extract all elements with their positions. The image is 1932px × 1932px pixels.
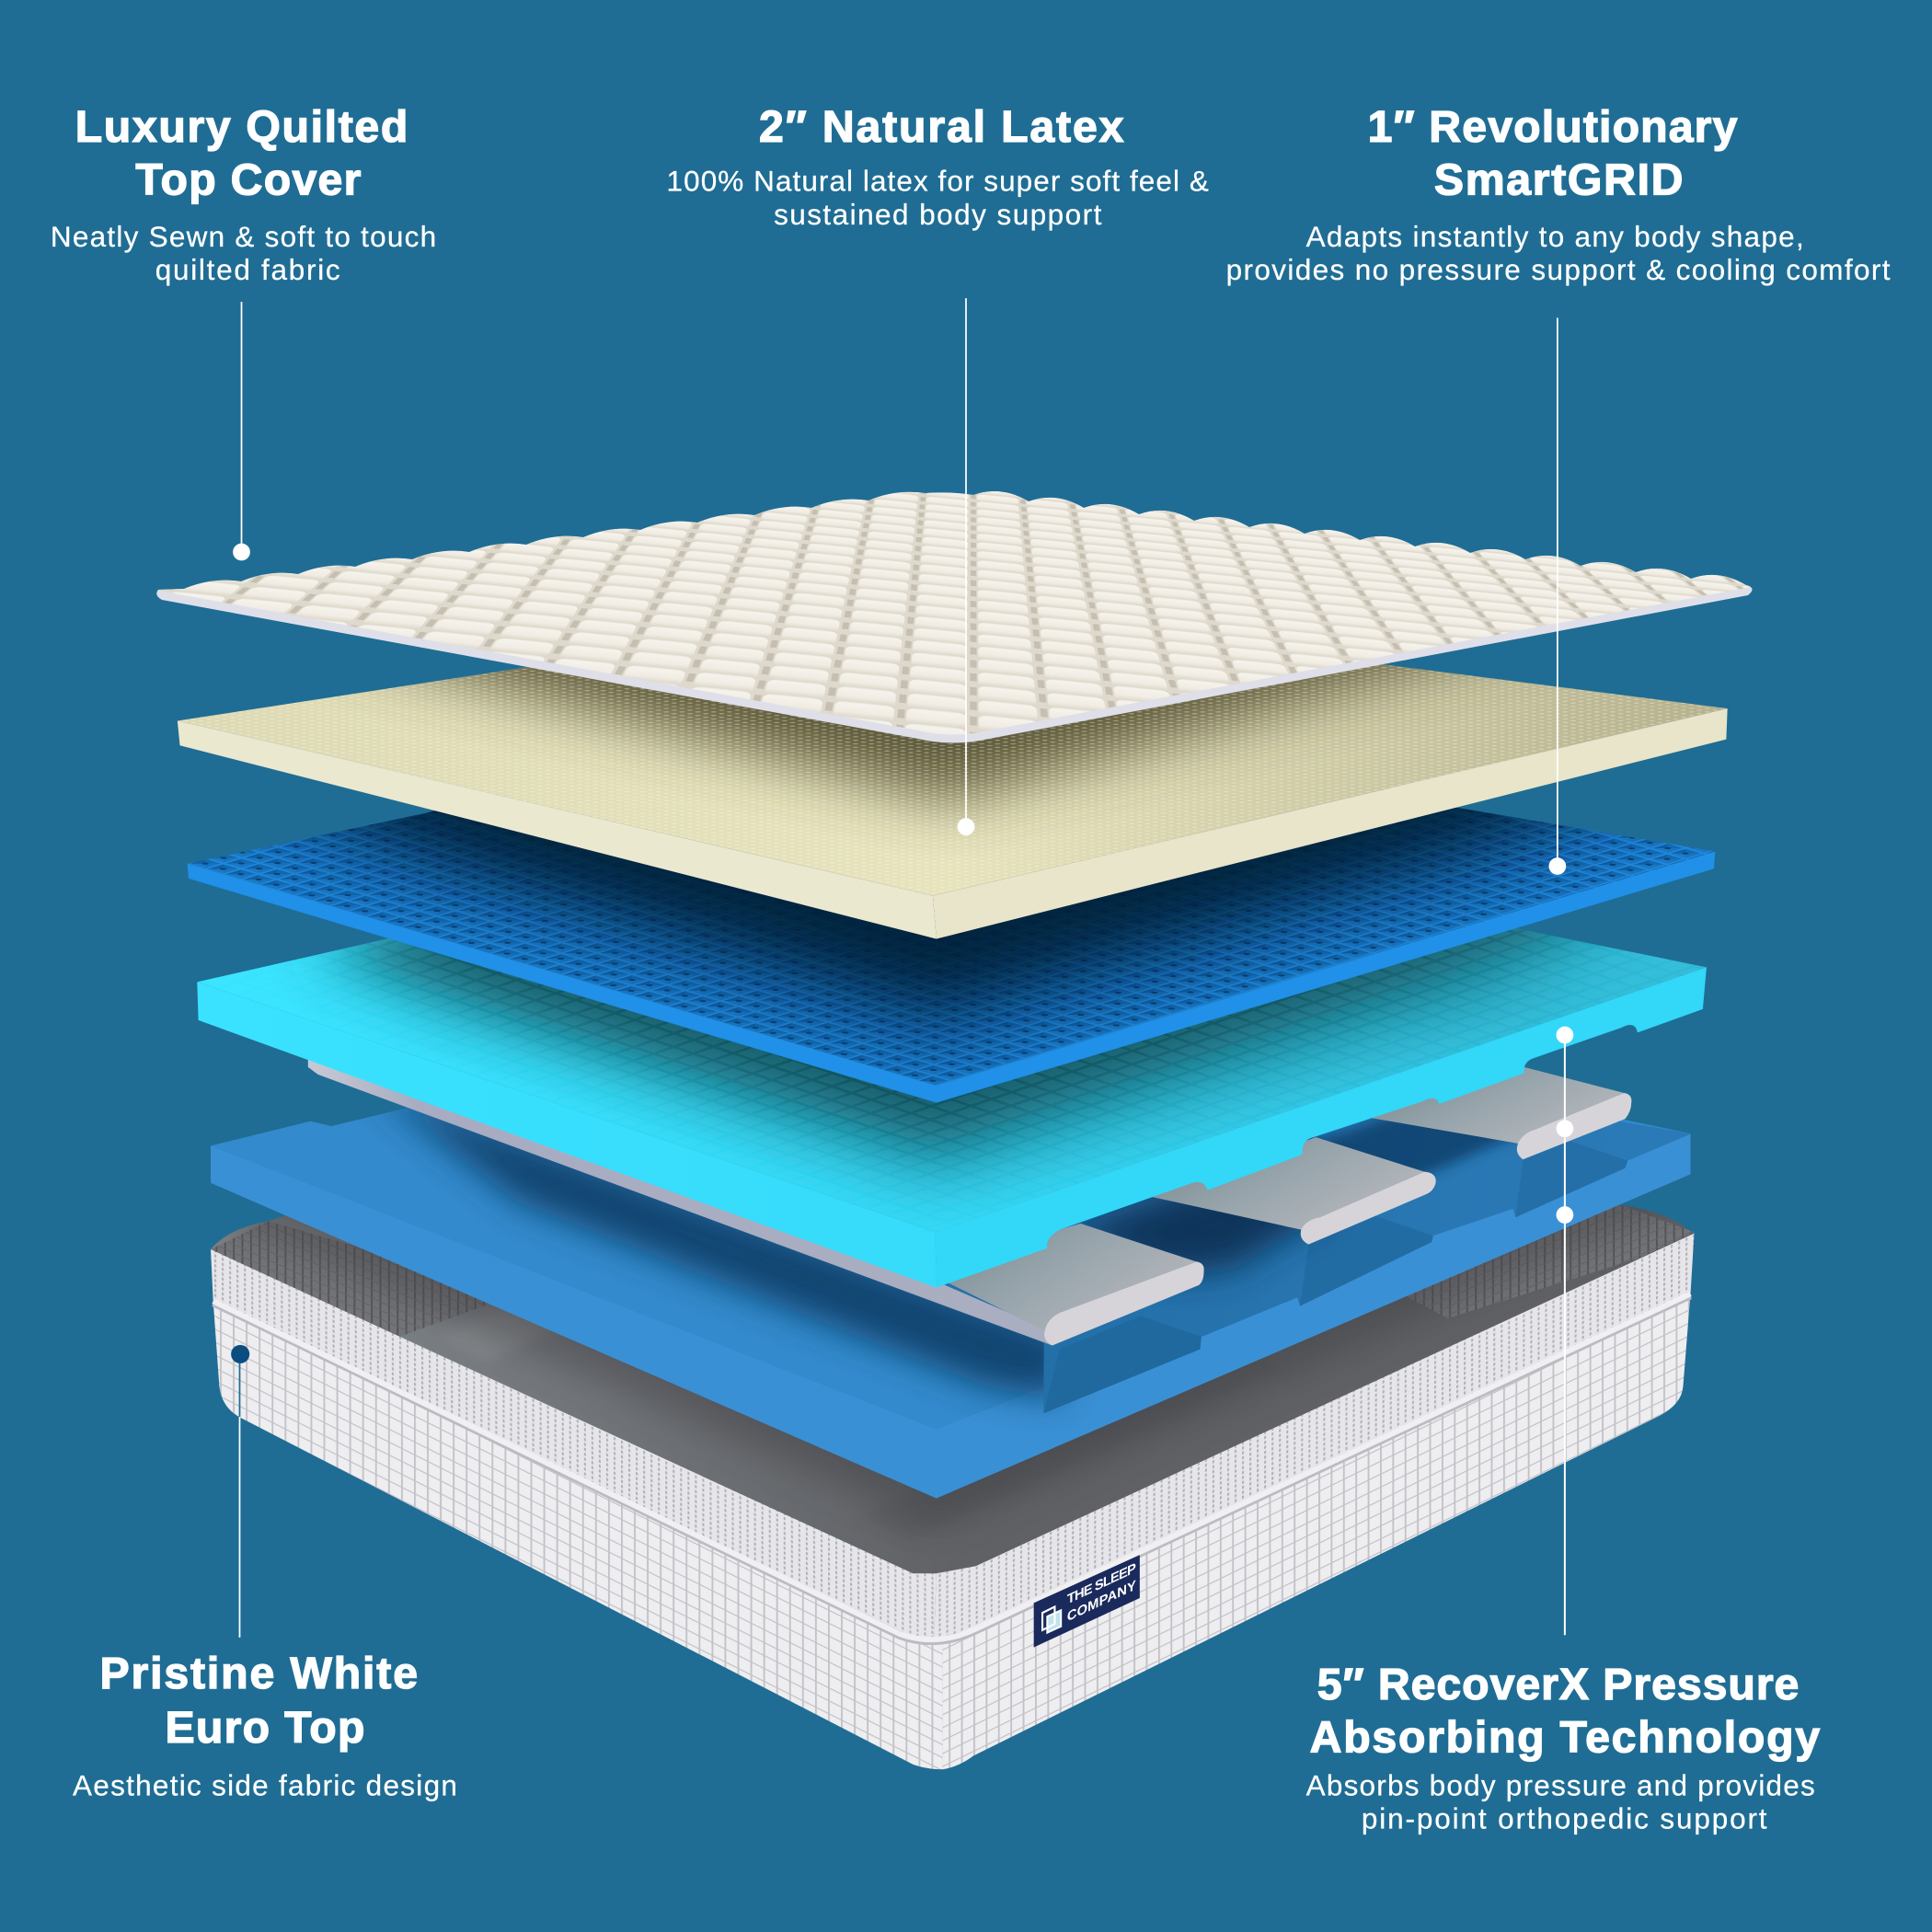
- caption: smartgrid: [1226, 102, 1891, 286]
- heading: 5″ RecoverX Pressure: [1317, 1660, 1799, 1709]
- description: provides no pressure support & cooling comfort: [1226, 254, 1891, 286]
- piping seam: [213, 1294, 1691, 1642]
- mattress left upper fabric strip: [211, 1249, 937, 1639]
- foam deep shadow between slats 2 and 3: [1316, 1119, 1514, 1185]
- latex pin-hole dots: [178, 592, 1728, 896]
- description: [667, 166, 1209, 231]
- heading: Pristine White: [99, 1649, 418, 1698]
- slat 1: [308, 1053, 1204, 1345]
- description: Neatly Sewn & soft to touch: [51, 221, 436, 253]
- heading: 2″ Natural Latex: [759, 102, 1124, 152]
- leader: quilted top cover: [233, 302, 250, 560]
- heading: [99, 1649, 418, 1753]
- description: Adapts instantly to any body shape,: [1306, 221, 1804, 253]
- layer: cyan pressure absorbing foam: [197, 921, 1707, 1288]
- heading: [1310, 1660, 1820, 1762]
- layer: white support slats: [308, 1053, 1631, 1345]
- heading: Euro Top: [165, 1703, 364, 1753]
- mattress right upper fabric strip: [934, 1234, 1695, 1639]
- layer: blue RecoverX base foam: [211, 1073, 1691, 1525]
- caption: luxury quilted top cover: [51, 102, 436, 286]
- smartgrid shadow on cyan: [308, 727, 1627, 1189]
- heading: [75, 102, 408, 205]
- foam deep shadow between slats 1 and 2: [1060, 1140, 1325, 1275]
- description: Aesthetic side fabric design: [73, 1769, 457, 1801]
- foam shadow on mattress: [230, 1205, 1664, 1525]
- mattress inner opening: [211, 1109, 1695, 1574]
- heading: SmartGRID: [1434, 155, 1683, 205]
- heading: Top Cover: [135, 155, 362, 205]
- cyan surface grid: [197, 740, 1707, 1232]
- description: 100% Natural latex for super soft feel &: [667, 166, 1209, 198]
- description: [1306, 1769, 1815, 1834]
- brand label: The Sleep Company: COMPANY: [1067, 1578, 1136, 1625]
- leader: recoverx with three dots: [1557, 1027, 1573, 1635]
- foam left soft shadow: [370, 1085, 1072, 1398]
- caption: recoverx: [1306, 1660, 1820, 1834]
- description: [51, 221, 436, 286]
- layer: natural latex: [178, 517, 1728, 939]
- foam top surface tone: [211, 985, 1691, 1430]
- description: sustained body support: [774, 199, 1102, 231]
- cyan front left side: [197, 982, 937, 1288]
- description: pin-point orthopedic support: [1362, 1803, 1767, 1835]
- brand label: The Sleep Company: THE SLEEP: [1067, 1560, 1136, 1608]
- description: quilted fabric: [155, 254, 340, 286]
- leader: smartgrid: [1548, 318, 1566, 875]
- mattress left lower quilted side: [213, 1301, 943, 1769]
- slat 3: [1369, 1067, 1631, 1159]
- exploded mattress lower layers: [177, 664, 1728, 1770]
- layer: luxury quilted top cover: [156, 492, 1757, 754]
- brand label: The Sleep Company: [1034, 1555, 1140, 1648]
- groove under slat 2: [1300, 1213, 1433, 1306]
- caption: euro top: [73, 1649, 457, 1801]
- layer: pristine white euro top mattress base: [211, 1109, 1695, 1769]
- latex shadow on smartgrid: [234, 604, 1651, 1047]
- foam body: [211, 985, 1691, 1499]
- smartgrid side faces: [188, 851, 1715, 1103]
- groove under slat 3: [1515, 1141, 1627, 1217]
- caption: natural latex: [667, 102, 1209, 231]
- smartgrid cells: [188, 665, 1715, 1086]
- heading: 1″ Revolutionary: [1368, 102, 1738, 152]
- heading: [1368, 102, 1738, 205]
- description: Absorbs body pressure and provides: [1306, 1769, 1815, 1801]
- mattress right lower quilted side: [943, 1294, 1691, 1769]
- latex front right side: [933, 708, 1728, 939]
- quilt shadow on latex: [320, 517, 1590, 801]
- slat 2: [1150, 1137, 1436, 1245]
- leader: euro top: [231, 1345, 249, 1638]
- latex top surface: [178, 592, 1728, 896]
- heading: Absorbing Technology: [1310, 1712, 1820, 1762]
- cyan front right side with notches: [936, 967, 1707, 1288]
- groove under slat 1: [1043, 1316, 1202, 1413]
- latex front left side: [178, 720, 937, 939]
- description: [1226, 221, 1891, 286]
- cyan top surface: [197, 740, 1707, 1232]
- heading: Luxury Quilted: [75, 102, 408, 152]
- quilted surface: [159, 491, 1750, 734]
- leader: natural latex: [958, 298, 974, 835]
- foam right grooves region: [1043, 1119, 1691, 1412]
- layer: smartgrid: [188, 604, 1715, 1103]
